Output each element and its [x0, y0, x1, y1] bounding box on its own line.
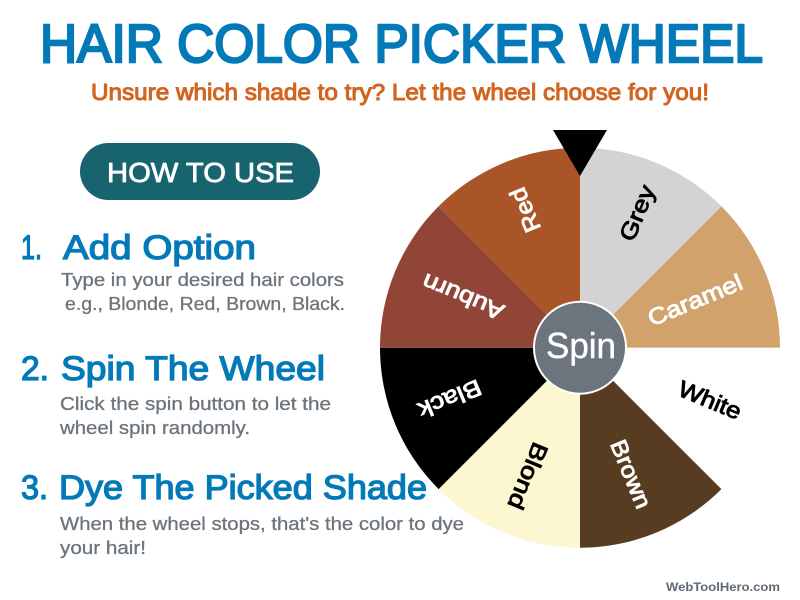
how to use badge: [80, 143, 320, 200]
step 2: [21, 350, 331, 438]
icon: pointer: [553, 130, 607, 176]
step 3: [21, 469, 464, 558]
how to use badge: HOW TO USE: [107, 157, 294, 188]
step 2 heading: 2.: [21, 350, 49, 388]
step 1 text: Type in your desired hair colors: [61, 270, 344, 290]
slice: Auburn: [380, 206, 580, 348]
step 3 heading: 3.: [21, 469, 48, 507]
step 1 text: e.g., Blonde, Red, Brown, Black.: [65, 294, 345, 314]
slice: Brown: [580, 348, 721, 548]
slice: Black: [380, 348, 580, 489]
step 3 text: When the wheel stops, that's the color to dye: [60, 514, 464, 534]
slice: White: [580, 348, 780, 489]
step 3 heading: Dye The Picked Shade: [59, 469, 427, 507]
watermark: WebToolHero.com: [666, 580, 780, 594]
step 2 text: wheel spin randomly.: [59, 418, 250, 438]
label: Brown: Brown: [605, 436, 657, 512]
step 2 text: [59, 394, 331, 438]
step 1 heading: 1.: [21, 229, 42, 267]
step 2 heading: Spin The Wheel: [61, 350, 325, 388]
step 1 text: [61, 270, 345, 314]
slice: Red: [439, 148, 580, 348]
title: HAIR COLOR PICKER WHEEL: [40, 14, 763, 74]
slice: Grey: [580, 148, 721, 348]
spin button: [534, 302, 626, 394]
label: Red: Red: [504, 184, 546, 236]
slice: Blond: [439, 348, 580, 548]
label: Black: Black: [414, 374, 485, 424]
label: Caramel: Caramel: [644, 269, 746, 331]
step 3 text: your hair!: [60, 538, 146, 558]
label: White: White: [675, 375, 745, 425]
label: Grey: Grey: [614, 181, 660, 245]
slice: Caramel: [580, 206, 780, 348]
step 2 text: Click the spin button to let the: [60, 394, 331, 414]
label: Auburn: Auburn: [418, 269, 508, 325]
subtitle: Unsure which shade to try? Let the wheel choose for you!: [91, 79, 709, 105]
spin button: Spin: [546, 325, 616, 366]
wheel: [380, 148, 780, 548]
step 3 text: [60, 514, 464, 558]
label: Blond: Blond: [503, 439, 553, 513]
step 1: [21, 229, 345, 314]
step 1 heading: Add Option: [63, 229, 256, 267]
